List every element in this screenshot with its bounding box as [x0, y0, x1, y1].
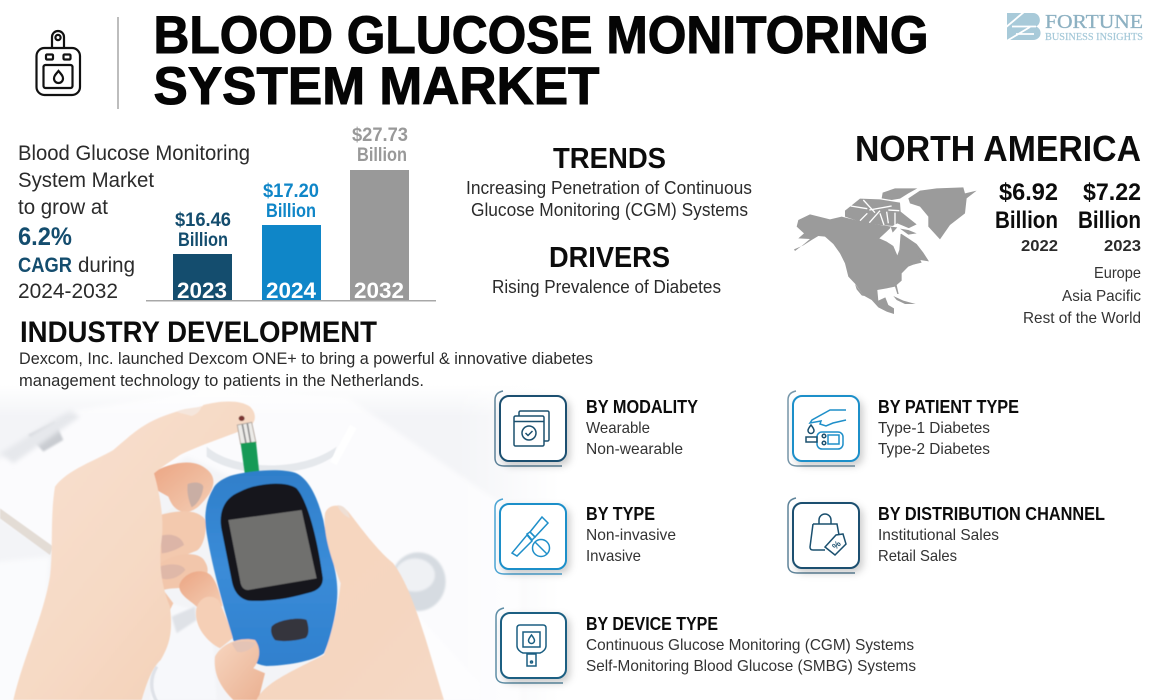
segment: by device type: Self-Monitoring Blood Glucose (SMBG) Systems [586, 658, 916, 675]
segment: by device type [496, 608, 916, 683]
bar 2024 [262, 181, 321, 303]
CAGR text block: 6.2% [18, 223, 72, 251]
bar 2032: 2032 [354, 278, 404, 303]
segment: by distribution channel: Retail Sales [878, 548, 957, 565]
region values [995, 179, 1141, 255]
bar 2023 [173, 210, 232, 303]
segment: by type [495, 499, 676, 574]
bar 2024: $17.20 [263, 181, 319, 202]
other regions list: Asia Pacific [1062, 288, 1141, 305]
2022 value: Billion [995, 207, 1058, 234]
segment: by patient type [788, 391, 1019, 466]
bar 2032 [350, 125, 409, 303]
header icon: test meter [36, 31, 80, 95]
fingers behind meter [179, 571, 223, 607]
trends: Glucose Monitoring (CGM) Systems [471, 200, 748, 220]
other regions list: Rest of the World [1023, 310, 1141, 327]
industry development [19, 316, 593, 390]
segment: by patient type: Type-1 Diabetes [878, 420, 990, 437]
CAGR text block: during [78, 254, 135, 277]
map: North America [794, 187, 977, 314]
segment: by type: BY TYPE [586, 504, 655, 524]
segment: by modality: Wearable [586, 420, 650, 437]
bar 2024: 2024 [266, 278, 317, 303]
CAGR text block: Blood Glucose Monitoring [18, 142, 250, 165]
CAGR text block: to grow at [18, 196, 108, 219]
other regions list [1023, 265, 1141, 327]
glucose meter [205, 470, 337, 666]
icon: glucose device [496, 608, 566, 683]
logo mark [1005, 12, 1041, 42]
bar 2023: 2023 [177, 278, 227, 303]
2022 value [995, 179, 1058, 255]
logo: Fortune Business Insights: BUSINESS INSIGHTS [1045, 32, 1143, 43]
2023 value: $7.22 [1083, 179, 1141, 206]
segment: by modality: Non-wearable [586, 441, 683, 458]
icon: scalpel and pill [495, 499, 566, 574]
photo background [0, 385, 560, 700]
CAGR text block: CAGR [18, 254, 72, 277]
segment: by device type: Continuous Glucose Monitoring (CGM) Systems [586, 637, 914, 654]
2022 value: $6.92 [999, 179, 1058, 206]
bar 2032: $27.73 [352, 125, 408, 146]
segment: by device type: BY DEVICE TYPE [586, 614, 718, 634]
industry development: Dexcom, Inc. launched Dexcom ONE+ to bring a powerful & innovative diabetes [19, 349, 593, 368]
hand holding the strip [13, 401, 255, 700]
region heading: NORTH AMERICA [855, 128, 1141, 169]
segment: by type: Non-invasive [586, 527, 676, 544]
drivers: Rising Prevalence of Diabetes [492, 277, 721, 297]
CAGR text block: 2024-2032 [18, 280, 118, 303]
bar 2032: Billion [357, 145, 407, 166]
bar 2023: Billion [178, 230, 228, 251]
fingers folded [152, 463, 213, 617]
title [154, 6, 928, 116]
title: SYSTEM MARKET [154, 57, 600, 116]
segment: by patient type: Type-2 Diabetes [878, 441, 990, 458]
icon: finger and meter [788, 391, 859, 466]
photo: hands holding a glucose meter [0, 385, 560, 700]
CAGR text block: System Market [18, 169, 154, 192]
test strip [237, 416, 259, 475]
segment: by modality [495, 391, 698, 466]
segment: by modality: BY MODALITY [586, 397, 698, 417]
segment: by patient type: BY PATIENT TYPE [878, 397, 1019, 417]
segment: by distribution channel [788, 498, 1105, 573]
industry development: INDUSTRY DEVELOPMENT [20, 316, 377, 349]
drivers [492, 242, 721, 297]
bar 2024: Billion [266, 201, 316, 222]
other regions list: Europe [1094, 265, 1141, 282]
logo: Fortune Business Insights: FORTUNE [1045, 11, 1143, 33]
segment: by type: Invasive [586, 548, 641, 565]
2023 value: Billion [1078, 207, 1141, 234]
holding hand [196, 505, 444, 700]
2023 value: 2023 [1104, 238, 1141, 255]
bar 2023: $16.46 [175, 210, 231, 231]
trends: Increasing Penetration of Continuous [466, 178, 752, 198]
title: BLOOD GLUCOSE MONITORING [154, 6, 928, 65]
2022 value: 2022 [1021, 238, 1058, 255]
icon: shopping bag with tag [788, 498, 859, 573]
icon: checklist windows [495, 391, 566, 466]
trends: TRENDS [553, 143, 666, 175]
industry development: management technology to patients in the Netherlands. [19, 371, 424, 390]
bar chart [146, 125, 436, 303]
CAGR text block [18, 142, 250, 303]
segment: by distribution channel: Institutional Sales [878, 527, 999, 544]
icon: shopping bag with tag: % [830, 539, 843, 551]
segment: by distribution channel: BY DISTRIBUTION CHANNEL [878, 504, 1105, 524]
trends [466, 143, 752, 220]
drivers: DRIVERS [549, 242, 670, 274]
palm and index finger [13, 401, 255, 700]
2023 value [1078, 179, 1141, 255]
logo: Fortune Business Insights [1005, 11, 1143, 43]
